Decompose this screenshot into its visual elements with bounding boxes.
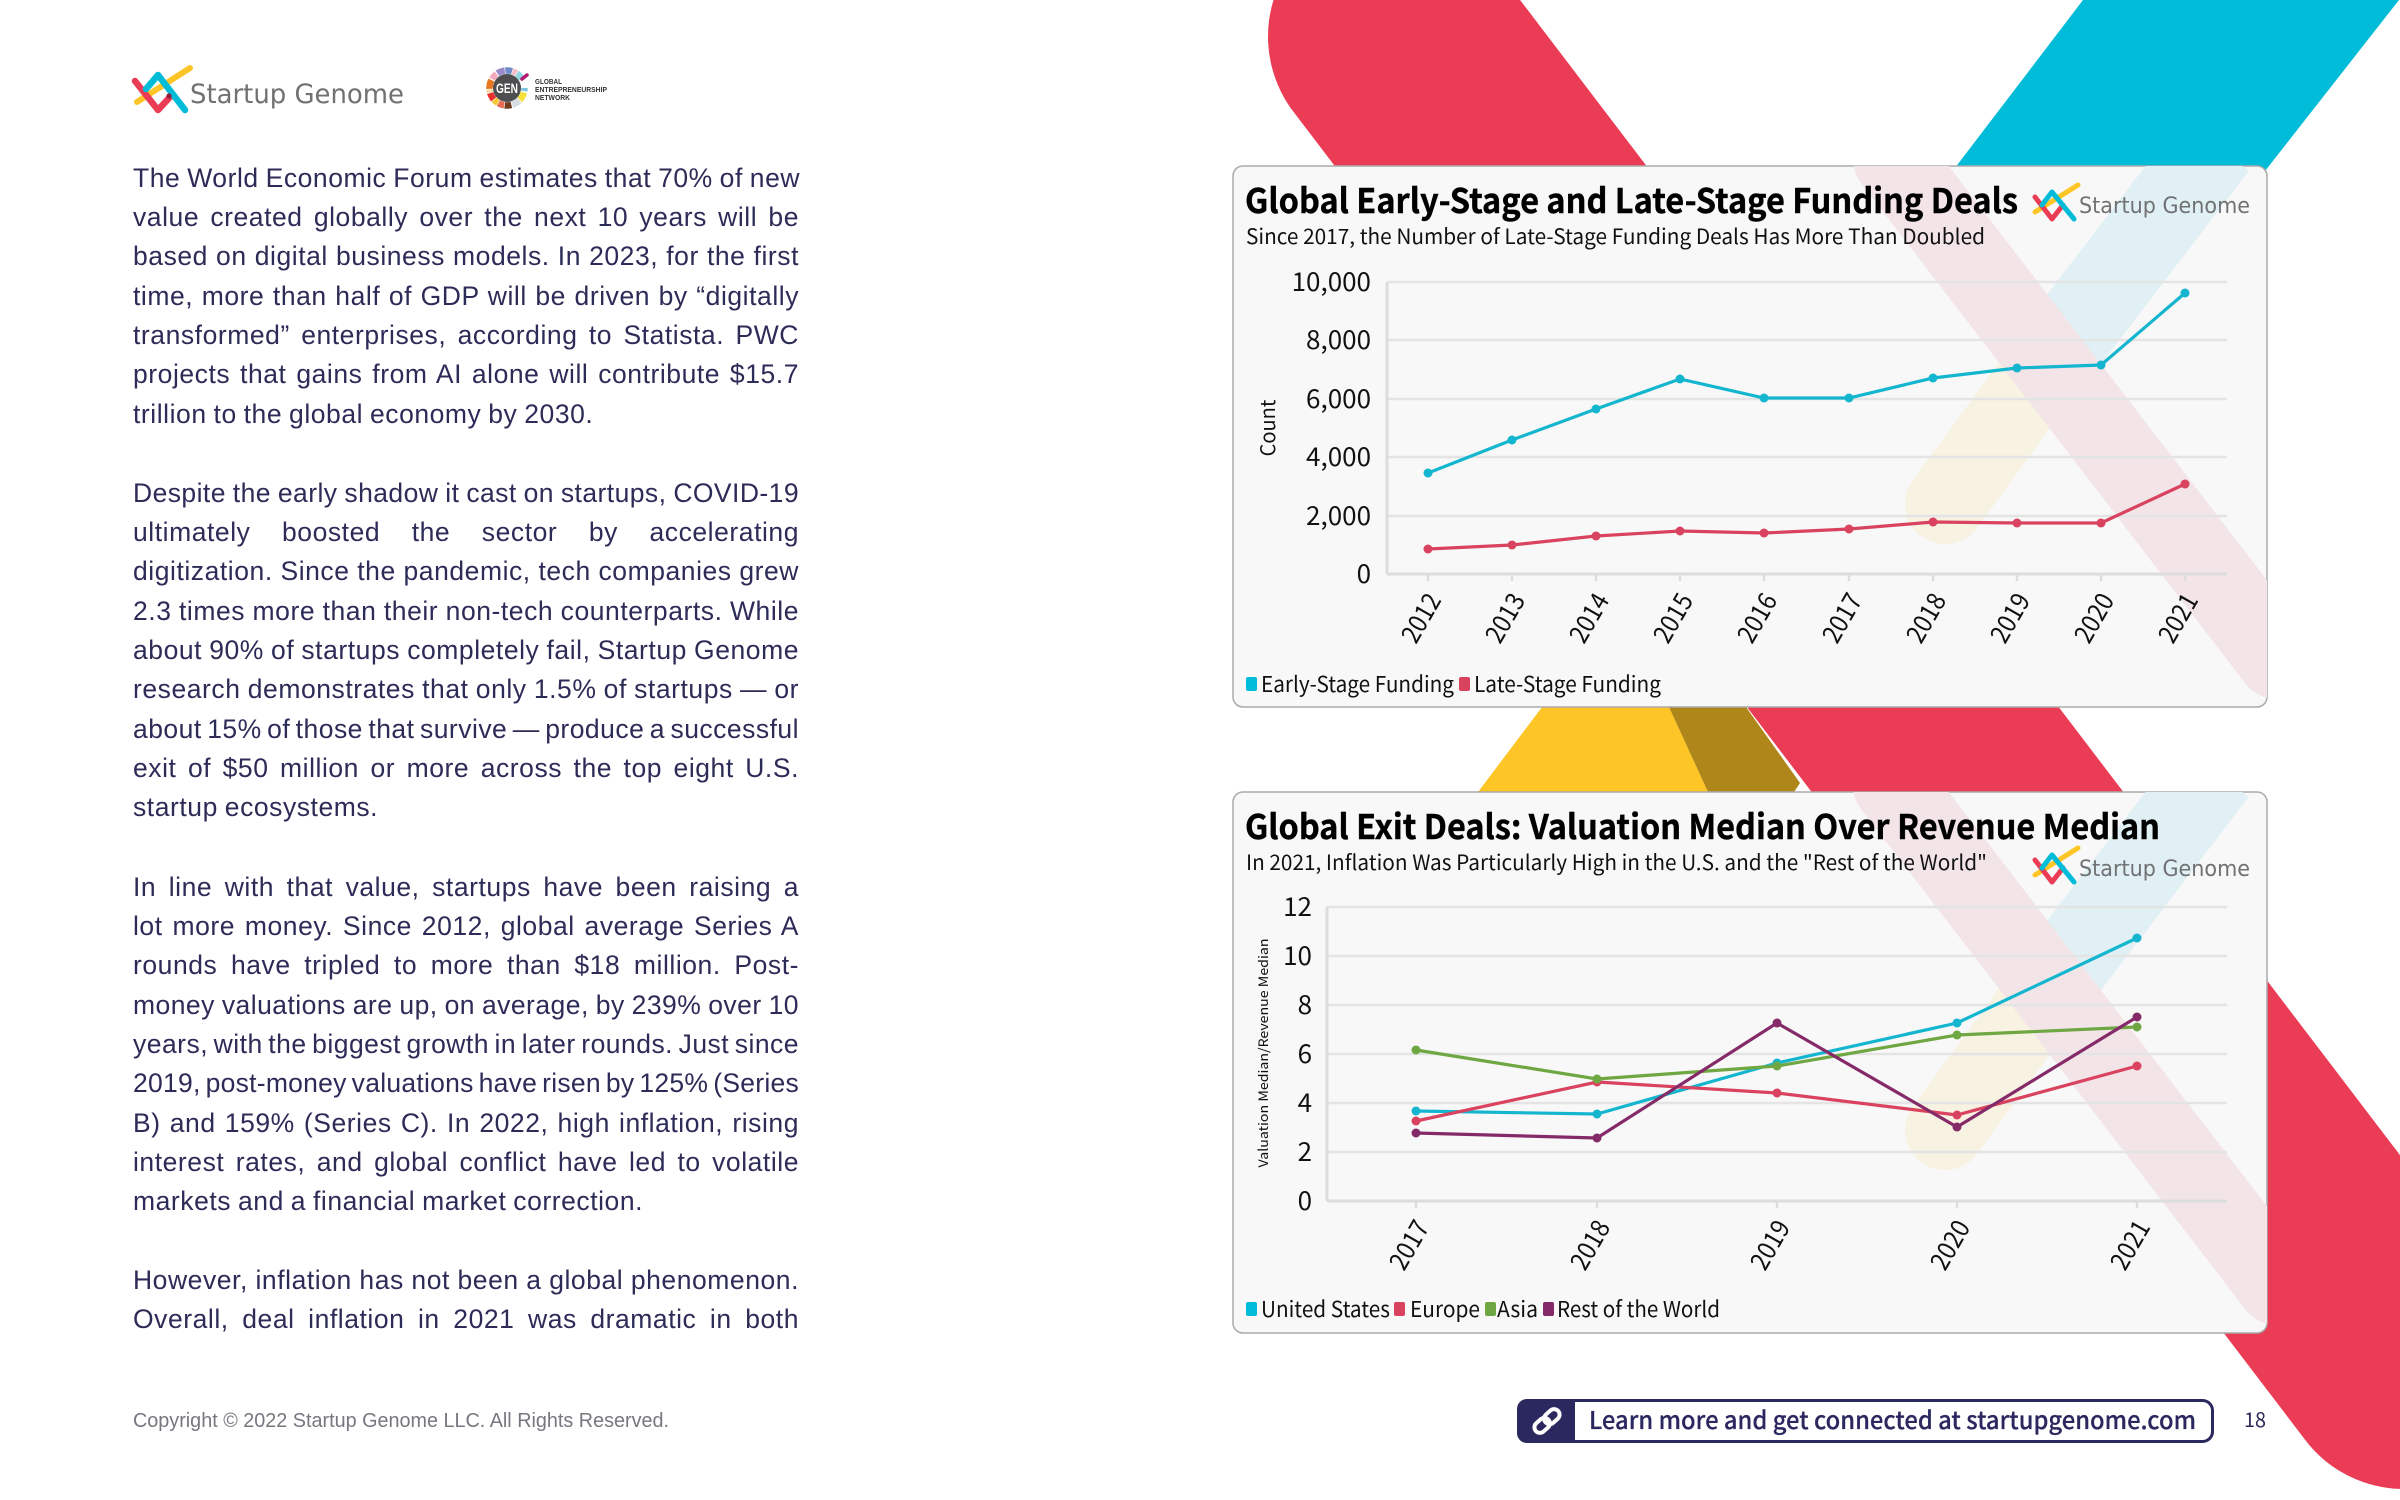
line chart: funding deals: 2019 (1980, 586, 2038, 649)
line chart: funding deals: 2012 (1391, 586, 1449, 649)
text block: paragraph 4: However, inflation has not been a global phenomenon. (133, 1264, 799, 1294)
startup genome logo (2035, 848, 2250, 882)
text block: paragraph 4 (133, 1264, 799, 1334)
call to action button: Learn more and get connected at startupgenome.com (1589, 1402, 2196, 1437)
line chart: funding deals (1252, 262, 2227, 649)
line chart: valuation over revenue: 4 (1298, 1083, 1312, 1120)
line chart: valuation over revenue: 8 (1298, 985, 1312, 1022)
panel: exit deals chart (1233, 771, 2277, 1333)
line chart: funding deals: 2015 (1643, 586, 1701, 649)
text block: paragraph 2: about 15% of those that survive — produce a successful (133, 714, 799, 744)
line chart: funding deals: 2018 (1896, 586, 1954, 649)
icon: link (1532, 1407, 1562, 1435)
page number: 18 (2244, 1404, 2266, 1433)
text block: paragraph 1: value created globally over the next 10 years will be (133, 202, 799, 232)
legend: Asia (1497, 1292, 1538, 1324)
series: late-stage funding (1424, 480, 2190, 554)
text block: paragraph 1: projects that gains from AI alone will contribute $15.7 (133, 359, 799, 389)
line chart: funding deals: 0 (1357, 554, 1371, 591)
line chart: valuation over revenue: 6 (1298, 1034, 1312, 1071)
legend: Early-Stage Funding (1261, 667, 1455, 699)
series: rest of the world (1412, 1012, 2142, 1142)
chart title: Global Exit Deals: Valuation Median Over Revenue Median (1245, 800, 2160, 849)
text block: paragraph 3: lot more money. Since 2012, global average Series A (133, 911, 799, 941)
series: united states (1412, 934, 2142, 1118)
text block: paragraph 2: 2.3 times more than their non-tech counterparts. While (133, 596, 799, 626)
line chart: valuation over revenue: 2019 (1740, 1212, 1798, 1276)
line chart: funding deals: 2016 (1727, 586, 1785, 649)
line chart: valuation over revenue (1253, 887, 2227, 1276)
line chart: valuation over revenue: 12 (1283, 887, 1312, 924)
text block: paragraph 1: The World Economic Forum estimates that 70% of new (133, 162, 800, 192)
magenta accent (522, 75, 527, 79)
legend (1246, 667, 1662, 699)
series: europe (1412, 1062, 2142, 1126)
text block: paragraph 3: In line with that value, startups have been raising a (133, 872, 799, 902)
line chart: funding deals: 6,000 (1306, 379, 1371, 416)
background ribbon: yellow (1472, 630, 1708, 800)
text block: paragraph 2: research demonstrates that only 1.5% of startups — or (133, 674, 799, 704)
line chart: funding deals: 8,000 (1306, 320, 1371, 357)
line chart: valuation over revenue: 2021 (2100, 1212, 2158, 1276)
logo: global entrepreneurship network: NETWORK (535, 93, 571, 102)
text block: paragraph 4: Overall, deal inflation in 2021 was dramatic in both (133, 1304, 799, 1334)
line chart: valuation over revenue: 2017 (1379, 1212, 1437, 1276)
text block: paragraph 1: transformed” enterprises, according to Statista. PWC (133, 320, 799, 350)
background ribbon: cyan (1900, 0, 2399, 240)
line chart: funding deals: 4,000 (1306, 437, 1371, 474)
legend: Rest of the World (1557, 1292, 1720, 1324)
line chart: funding deals: 2,000 (1306, 496, 1371, 533)
text block: paragraph 2: digitization. Since the pandemic, tech companies grew (133, 556, 799, 586)
logo: startup genome (135, 68, 404, 110)
panel: early and late stage funding chart (1233, 145, 2277, 707)
line chart: valuation over revenue: 2 (1298, 1132, 1312, 1169)
text block: paragraph 3: rounds have tripled to more than $18 million. Post- (133, 950, 799, 980)
text block: paragraph 3: markets and a financial market correction. (133, 1186, 643, 1216)
background ribbon overlap: dark gold (1669, 707, 1800, 792)
text block: paragraph 1: based on digital business models. In 2023, for the first (133, 241, 799, 271)
line chart: funding deals: 2021 (2148, 586, 2206, 649)
legend: United States (1261, 1292, 1390, 1324)
logo: global entrepreneurship network: ENTREPRENEURSHIP (535, 85, 607, 94)
background ribbon: red (1392, 36, 2400, 1365)
chart subtitle: Since 2017, the Number of Late-Stage Funding Deals Has More Than Doubled (1246, 221, 1985, 251)
logo: global entrepreneurship network: GLOBAL (535, 77, 562, 86)
line chart: funding deals: 2020 (2064, 586, 2122, 649)
logo: global entrepreneurship network: GEN (496, 80, 518, 96)
line chart: valuation over revenue: 2018 (1560, 1212, 1618, 1276)
text block: paragraph 3: B) and 159% (Series C). In 2022, high inflation, rising (133, 1108, 799, 1138)
text block: paragraph 2 (133, 478, 799, 822)
chart title: Global Early-Stage and Late-Stage Funding Deals (1245, 174, 2018, 223)
line chart: funding deals: 2014 (1559, 586, 1617, 649)
logo: startup genome: Startup Genome (190, 79, 404, 110)
text block: paragraph 3: 2019, post-money valuations have risen by 125% (Series (133, 1068, 799, 1098)
text block: paragraph 1: time, more than half of GDP will be driven by “digitally (133, 281, 799, 311)
y axis label: Valuation Median/Revenue Median (1253, 938, 1272, 1168)
line chart: funding deals: 10,000 (1292, 262, 1371, 299)
text block: paragraph 3 (133, 872, 799, 1216)
startup genome logo (2035, 185, 2250, 219)
footer: copyright: Copyright © 2022 Startup Genome LLC. All Rights Reserved. (133, 1410, 669, 1432)
text block: paragraph 1: trillion to the global economy by 2030. (133, 399, 593, 429)
line chart: valuation over revenue: 2020 (1920, 1212, 1978, 1276)
line chart: funding deals: 2013 (1475, 586, 1533, 649)
text block: paragraph 2: ultimately boosted the sector by accelerating (133, 517, 799, 547)
legend: Europe (1410, 1292, 1480, 1324)
line chart: valuation over revenue: 0 (1298, 1181, 1312, 1218)
startup genome logo: Startup Genome (2079, 857, 2250, 882)
text block: paragraph 2: startup ecosystems. (133, 792, 378, 822)
series: early-stage funding (1424, 288, 2190, 478)
series: asia (1412, 1022, 2142, 1084)
text block: paragraph 2: about 90% of startups completely fail, Startup Genome (133, 635, 799, 665)
text block: paragraph 3: money valuations are up, on average, by 239% over 10 (133, 990, 799, 1020)
legend (1246, 1292, 1720, 1324)
text block: paragraph 2: Despite the early shadow it cast on startups, COVID-19 (133, 478, 799, 508)
legend: Late-Stage Funding (1474, 667, 1662, 699)
startup genome logo: Startup Genome (2079, 194, 2250, 219)
logo: global entrepreneurship network (490, 70, 607, 106)
text block: paragraph 3: interest rates, and global conflict have led to volatile (133, 1147, 799, 1177)
text block: paragraph 1 (133, 162, 800, 429)
text block: paragraph 3: years, with the biggest growth in later rounds. Just since (133, 1029, 799, 1059)
chart subtitle: In 2021, Inflation Was Particularly High in the U.S. and the "Rest of the World" (1246, 847, 1987, 877)
y axis label: Count (1252, 399, 1281, 456)
line chart: funding deals: 2017 (1812, 586, 1870, 649)
text block: paragraph 2: exit of $50 million or more across the top eight U.S. (133, 753, 799, 783)
line chart: valuation over revenue: 10 (1283, 936, 1312, 973)
